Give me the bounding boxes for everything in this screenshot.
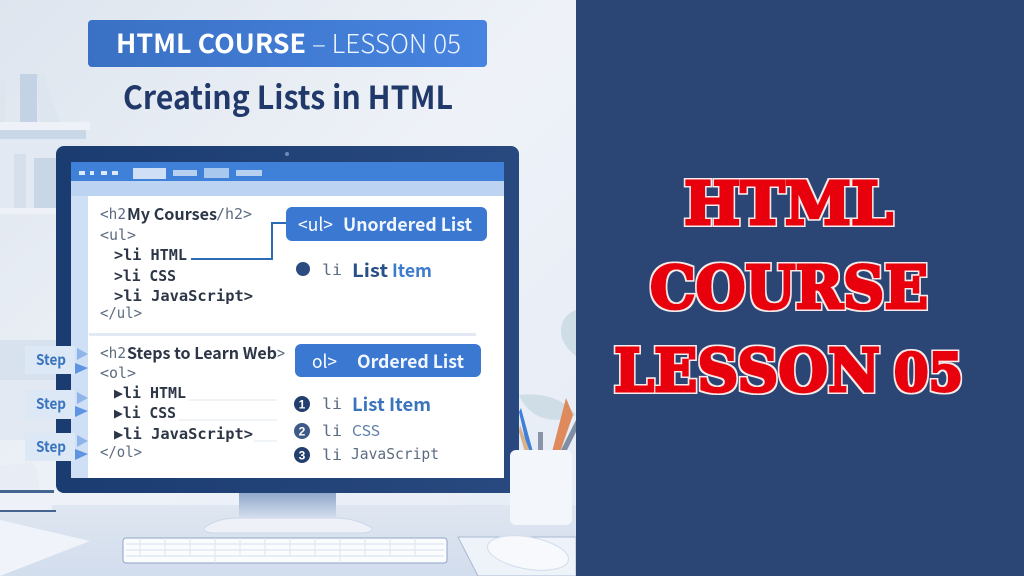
badge: ordered list: Ordered List: [357, 348, 464, 374]
title banner: – LESSON 05: [312, 24, 461, 61]
ordered list items: li: [322, 446, 342, 464]
ordered list items: li: [322, 395, 342, 413]
browser toolbar: [71, 162, 504, 196]
code: unordered list: <h2: [100, 205, 126, 223]
ordered list items: JavaScript: [351, 445, 439, 463]
badge: unordered list: <ul>: [298, 211, 333, 237]
step tags: Step: [36, 393, 66, 414]
left panel background: [0, 0, 576, 576]
subtitle: Creating Lists in HTML: [123, 73, 453, 119]
bookshelf decoration: [0, 74, 90, 440]
stacked notebooks: [0, 462, 56, 512]
code: unordered list: >li HTML: [114, 246, 187, 264]
ordered list items: [294, 391, 439, 464]
code: ordered list: ▶li CSS: [114, 404, 176, 422]
unordered list item: List: [352, 257, 388, 283]
pen cup: [510, 398, 576, 525]
ordered list items: 1: [299, 398, 306, 412]
code: unordered list: /h2>: [216, 205, 252, 223]
code: ordered list: [100, 340, 285, 461]
main title: [614, 169, 963, 405]
code: unordered list: >li CSS: [114, 267, 176, 285]
code: ordered list: Steps to Learn Web: [127, 340, 277, 364]
monitor: [56, 146, 519, 493]
main title: COURSE: [650, 253, 928, 322]
ordered list items: 2: [299, 424, 306, 438]
desk: [0, 505, 576, 576]
main title: 05: [894, 343, 963, 404]
plant leaves decoration: [519, 310, 576, 420]
unordered list item: [296, 257, 432, 283]
ordered list items: li: [322, 422, 342, 440]
code: ordered list: ▶li JavaScript>: [114, 425, 253, 443]
badge: unordered list: Unordered List: [343, 211, 472, 237]
main title: HTML: [684, 169, 893, 238]
code: ordered list: ▶li HTML: [114, 384, 186, 402]
title banner: [88, 20, 487, 67]
ordered list items: List Item: [352, 391, 431, 417]
ordered list items: 3: [299, 448, 306, 462]
unordered list item: Item: [392, 257, 432, 283]
badge: ordered list: [295, 344, 481, 377]
keyboard: [123, 538, 447, 563]
step tags: [25, 346, 88, 461]
connector: li to unordered list: [191, 223, 287, 259]
code: unordered list: [100, 201, 253, 322]
step tags: Step: [36, 349, 66, 370]
code: unordered list: >li JavaScript>: [114, 287, 253, 305]
ordered list items: CSS: [352, 420, 380, 441]
code: ordered list: <h2: [100, 344, 126, 362]
code: ordered list: </ol>: [100, 443, 142, 461]
main title: LESSON: [614, 336, 880, 405]
badge: unordered list: [286, 207, 487, 241]
mouse and pad: [458, 530, 576, 576]
code: unordered list: My Courses: [127, 201, 217, 225]
code: ordered list: <ol>: [100, 364, 136, 382]
title banner: HTML COURSE: [116, 24, 306, 61]
unordered list item: li: [322, 261, 342, 279]
step tags: Step: [36, 436, 66, 457]
badge: ordered list: ol>: [312, 348, 337, 374]
code: unordered list: </ul>: [100, 304, 142, 322]
code: ordered list: >: [277, 344, 285, 362]
monitor stand: [204, 492, 372, 533]
code: unordered list: <ul>: [100, 226, 136, 244]
paper on desk: [0, 520, 90, 576]
right panel: [576, 0, 1024, 576]
